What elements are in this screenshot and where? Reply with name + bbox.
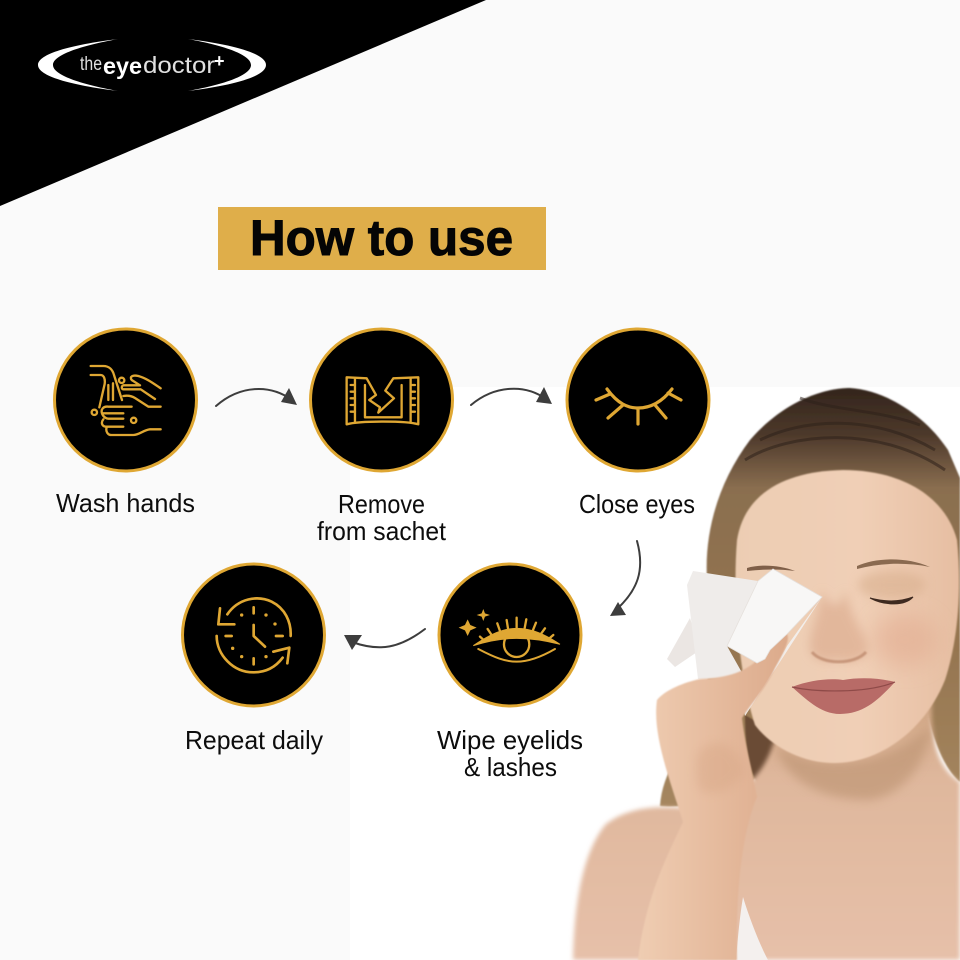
black corner banner [0, 0, 486, 206]
wipe lower strip [742, 597, 822, 716]
logo: the eye doctor: the [80, 54, 102, 75]
hand shadow [696, 743, 745, 793]
wipe top fold [727, 569, 822, 663]
nose shading [810, 590, 868, 662]
face [736, 470, 959, 763]
eyebrow: left [747, 566, 795, 571]
top strap [736, 897, 768, 960]
hair strands [745, 398, 945, 470]
white photo backdrop [350, 387, 960, 960]
arrow: step 5 to 4 [344, 629, 425, 650]
arrow: step 3 to 5 [610, 541, 640, 616]
logo: the eye doctor [38, 39, 266, 91]
neck and torso [573, 700, 960, 960]
label: wipe eyelids and lashes: & lashes [464, 752, 557, 782]
logo: the eye doctor: eye [103, 53, 142, 79]
hair [660, 388, 960, 806]
label: remove from sachet: from sachet [317, 516, 447, 546]
nose underside [812, 652, 866, 662]
step 5 circle: eye with sparkles icon [439, 564, 581, 706]
eyebrow: right [857, 559, 930, 569]
hand and forearm [638, 634, 788, 960]
step 1 circle: wash hands icon [54, 329, 196, 471]
label: wipe eyelids and lashes [437, 725, 583, 782]
lip line [792, 682, 895, 691]
step 3 circle: closed eye icon [567, 329, 709, 471]
logo: the eye doctor: doctor [143, 52, 215, 78]
label: wipe eyelids and lashes: Wipe eyelids [437, 725, 583, 755]
photo: woman wiping eye [573, 388, 960, 960]
eye socket shading [858, 571, 926, 599]
step 2 circle: torn sachet icon [310, 329, 452, 471]
label: repeat daily: Repeat daily [185, 725, 323, 755]
label: remove from sachet [317, 489, 447, 546]
wipe body [687, 571, 758, 679]
wipe ruffled edge [667, 618, 700, 667]
cheek blush [873, 614, 937, 666]
hair lower dark section [745, 715, 780, 785]
arrow: step 2 to 3 [471, 387, 552, 405]
closed eye [870, 597, 913, 604]
label: close eyes: Close eyes [579, 489, 695, 519]
lips [792, 678, 895, 714]
label: remove from sachet: Remove [338, 489, 425, 519]
label: wash hands: Wash hands [56, 488, 195, 518]
logo: the eye doctor: + [214, 51, 225, 71]
neck shadow [775, 725, 932, 800]
arrow: step 1 to 2 [216, 388, 297, 406]
step 4 circle: repeat clock icon [182, 564, 324, 706]
heading: How to use: How to use [250, 210, 513, 266]
